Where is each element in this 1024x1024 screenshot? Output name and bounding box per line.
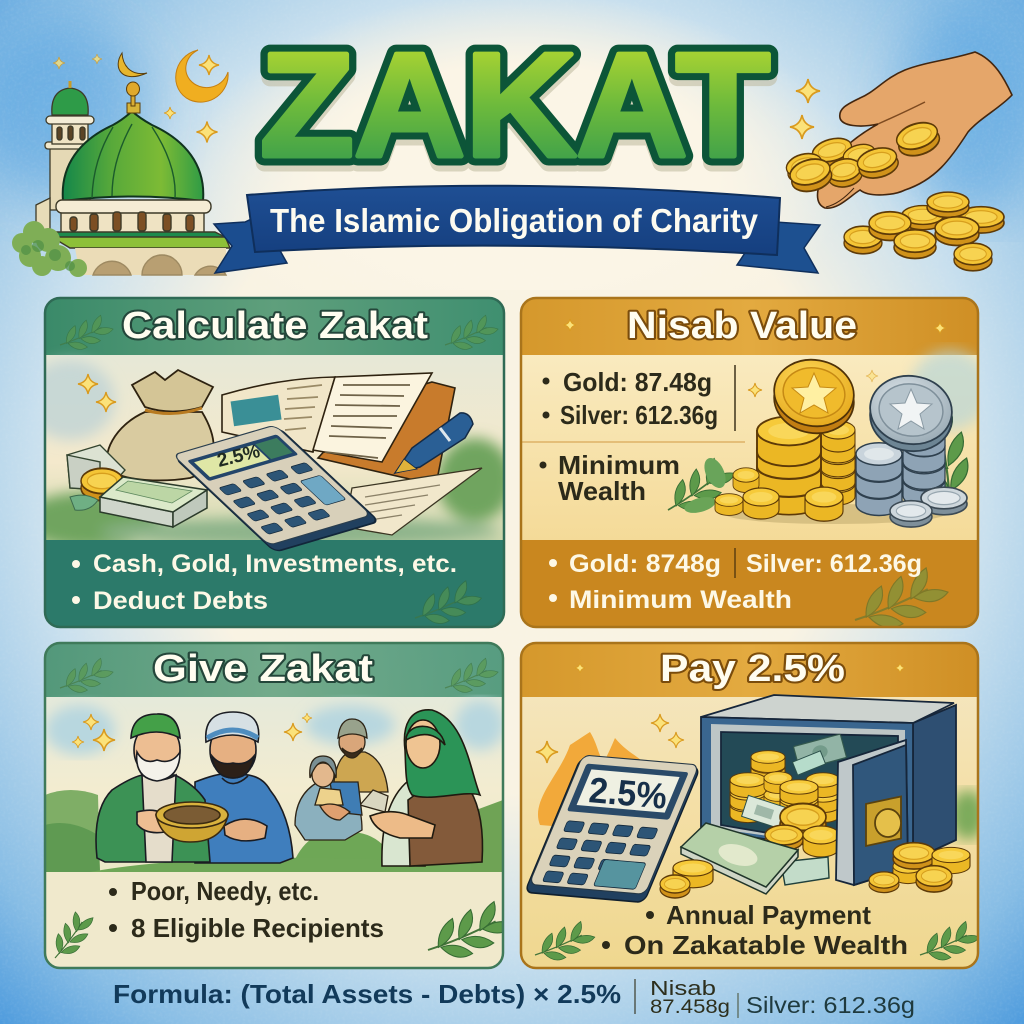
list: nisab values: Wealth	[558, 476, 646, 506]
drum and base	[50, 200, 230, 275]
panel: nisab value	[521, 298, 990, 634]
list: calculate zakat: Cash, Gold, Investments, etc.	[93, 550, 457, 578]
list: pay 2.5%: On Zakatable Wealth	[624, 930, 908, 960]
coins in safe	[730, 734, 847, 857]
rule	[521, 441, 745, 443]
calculator	[172, 425, 379, 552]
icon: crescent and stars	[53, 50, 228, 142]
coin	[81, 468, 123, 501]
sky tint	[910, 350, 990, 430]
list: nisab band: Silver: 612.36g	[746, 550, 922, 578]
formula footer: Formula: (Total Assets - Debts) × 2.5%	[113, 979, 621, 1009]
finial with crescent	[118, 53, 147, 113]
heading: calculate zakat: Calculate Zakat	[122, 305, 428, 347]
calculator	[525, 755, 701, 902]
flame glow	[538, 732, 641, 830]
safe	[701, 695, 956, 860]
safe door	[836, 740, 908, 885]
list: nisab values	[540, 367, 718, 506]
left leaves	[668, 458, 734, 513]
panel outline: calculate zakat	[45, 298, 504, 627]
silver coins	[856, 371, 967, 527]
gold coins	[715, 354, 859, 521]
open book	[222, 373, 455, 485]
list: pay 2.5%: Annual Payment	[666, 900, 871, 930]
list: calculate zakat	[72, 550, 457, 615]
background villagers	[295, 719, 388, 840]
formula footer	[113, 978, 915, 1018]
list: calculate zakat: Deduct Debts	[93, 587, 268, 615]
front cash stack	[100, 477, 207, 527]
list: nisab values: Minimum	[558, 450, 680, 480]
panel outline: nisab value	[521, 298, 978, 627]
coins in front	[660, 843, 970, 898]
panel header	[521, 643, 978, 697]
illustration: mosque	[12, 53, 230, 277]
bowl	[156, 802, 228, 842]
pen	[395, 413, 473, 473]
man with blue robe	[195, 712, 293, 863]
sky and foliage	[45, 700, 505, 872]
list: nisab band	[549, 548, 922, 614]
list: nisab band: Minimum Wealth	[569, 586, 792, 614]
cash stack	[681, 823, 829, 894]
list: give zakat: Poor, Needy, etc.	[131, 876, 319, 906]
back cash	[67, 445, 125, 490]
heading: nisab value: Nisab Value	[627, 305, 857, 347]
dome	[63, 111, 203, 201]
list: nisab values: Gold: 87.48g	[563, 367, 712, 397]
ribbon banner with subtitle: The Islamic Obligation of Charity	[270, 202, 759, 239]
list: nisab values: Silver: 612.36g	[560, 400, 718, 430]
panel header	[521, 298, 978, 355]
bush	[12, 221, 87, 277]
title: ZAKAT	[260, 23, 770, 188]
illustration: hand dropping coins	[784, 52, 1012, 271]
formula footer: Nisab	[650, 978, 716, 1000]
lower text area	[46, 888, 502, 967]
woman in green hijab	[370, 710, 482, 866]
list: give zakat: 8 Eligible Recipients	[131, 913, 384, 943]
title: ZAKAT	[260, 30, 770, 195]
panel: calculate zakat	[20, 298, 513, 628]
calculator: 2.5%	[215, 441, 262, 472]
panel outline: give zakat	[45, 643, 503, 968]
right leaves	[946, 415, 968, 488]
panel outline: pay 2.5%	[521, 643, 978, 968]
coin pile	[844, 192, 1004, 271]
formula footer: Silver: 612.36g	[746, 992, 915, 1018]
heading: pay 2.5%: Pay 2.5%	[660, 648, 845, 690]
title: ZAKAT	[260, 23, 770, 188]
green note	[70, 495, 98, 510]
papers	[345, 468, 482, 535]
heading: give zakat: Give Zakat	[153, 648, 373, 690]
panel: give zakat	[40, 643, 514, 968]
panel header	[45, 643, 503, 697]
elder with green robe	[96, 714, 210, 862]
list: give zakat	[109, 876, 384, 943]
side foliage	[953, 785, 977, 845]
shadow	[725, 504, 945, 524]
panel: pay 2.5%	[521, 643, 986, 968]
panel header	[45, 298, 504, 355]
calculator: 2.5%	[587, 769, 669, 817]
list: pay 2.5%	[602, 900, 908, 960]
list: nisab band: Gold: 8748g	[569, 550, 721, 578]
ribbon banner with subtitle	[214, 186, 820, 273]
lower band	[521, 540, 978, 627]
divider	[734, 365, 736, 431]
formula footer: 87.458g	[650, 997, 730, 1018]
lower band	[45, 540, 504, 627]
foliage and sky	[20, 360, 513, 548]
minaret	[36, 81, 95, 230]
money bag	[107, 370, 214, 480]
